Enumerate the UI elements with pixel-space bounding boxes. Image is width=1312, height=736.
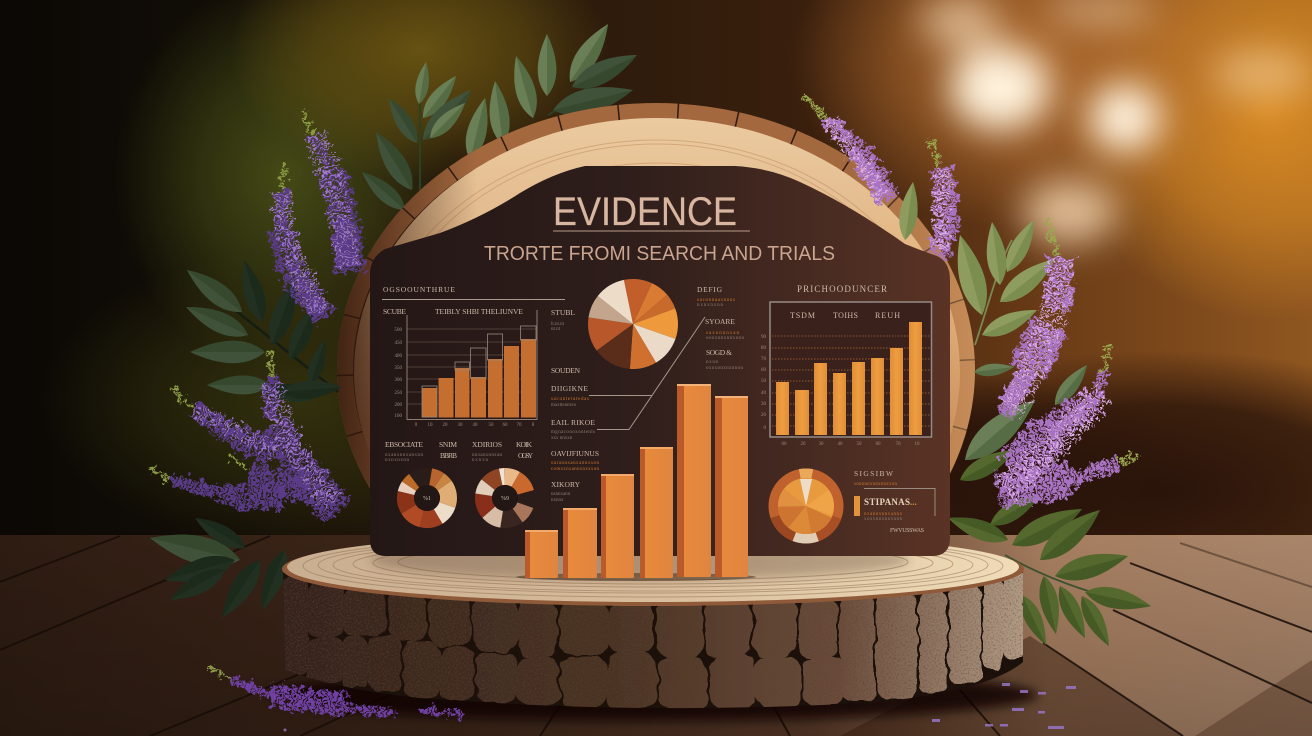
lavender sprig on floor	[210, 668, 464, 715]
middle text column: EAIL RIKOE	[551, 418, 595, 427]
middle text column: oarannxanxannxxon	[551, 461, 600, 466]
ring pie legend: nxannxnnxannx	[864, 512, 902, 517]
right bar chart: 30	[818, 442, 824, 447]
donut chart 1	[397, 468, 457, 528]
left bar chart: 10	[428, 423, 433, 428]
right text column: saxonnnxan	[706, 331, 740, 336]
right text column: DEFIG	[697, 285, 723, 294]
ring pie chart	[768, 468, 844, 544]
right text column: nxnn	[706, 360, 718, 365]
tree stump platform	[268, 532, 1038, 730]
lavender left lower	[150, 352, 338, 512]
bottom left labels: EBSOCIATE	[385, 440, 423, 449]
right bar chart: 50	[761, 379, 766, 384]
left bar chart: TEIBLY SHBI THELIUNVE	[435, 307, 523, 316]
left bar chart: 20	[442, 423, 448, 428]
left bar chart: OGSOOUNTHRUE	[383, 285, 455, 294]
ring pie legend	[854, 469, 935, 534]
bottom left labels: OGSY	[518, 451, 534, 460]
right bar chart: 40	[838, 442, 843, 447]
left bar chart	[382, 285, 565, 428]
right text column: SYOARE	[705, 317, 735, 326]
right bar chart: 0	[764, 426, 766, 431]
right bar chart: REUH	[875, 311, 900, 320]
right bar chart: 60	[876, 442, 881, 447]
left bar chart: 250	[394, 391, 402, 396]
middle text column: nsnnxann	[551, 492, 571, 497]
right bar chart: 70	[761, 357, 766, 362]
right text column: oxoxonxnxnnon	[706, 366, 744, 371]
ring pie legend: ...	[910, 497, 917, 507]
middle text column: nxnnx	[551, 498, 564, 503]
left bar chart: 70	[516, 423, 522, 428]
donut chart 2: %9	[501, 496, 509, 502]
right bar chart: 60	[761, 368, 766, 373]
connector lines	[589, 317, 705, 430]
ring pie legend: SIGSIBW	[854, 469, 894, 478]
middle text column: saconteratedas	[551, 397, 589, 402]
scattered petals	[284, 683, 1076, 732]
ring pie legend: soonnnxnnxnnxxon	[854, 482, 898, 487]
pie chart	[607, 298, 659, 350]
ring pie legend: STIPANAS	[864, 497, 910, 507]
left bar chart: 60	[502, 423, 508, 428]
middle text column: xxx nnxxn	[551, 436, 573, 441]
top leaf sprigs, behind slice	[356, 18, 642, 216]
right text column	[697, 285, 744, 371]
middle text column	[551, 308, 600, 503]
middle text column: XIKORY	[551, 480, 581, 489]
middle text column: DIIGIKNE	[551, 384, 588, 393]
bottom left labels: BBRB	[440, 451, 457, 460]
left bar chart: 450	[394, 341, 402, 346]
right leaf sprig	[896, 181, 1093, 488]
left bar chart: 30	[458, 423, 463, 428]
right bar chart: 20	[800, 442, 806, 447]
left bar chart: 200	[394, 403, 402, 408]
lavender right	[998, 218, 1140, 490]
middle text column: mgnaconoxontenls	[551, 430, 595, 435]
left bar chart: 100	[394, 414, 402, 419]
right bar chart: 30	[761, 402, 766, 407]
bottom left labels: nxnxnxnn	[385, 458, 410, 463]
left bar chart: SCUBE	[383, 307, 406, 316]
left bar chart: 40	[472, 423, 478, 428]
3D orange bars	[516, 384, 756, 581]
lavender left upper	[280, 113, 350, 318]
lavender top centre-right	[805, 97, 948, 258]
right lower leaf sprig	[945, 488, 1153, 650]
dashboard panel	[370, 166, 950, 556]
right bar chart: 40	[761, 391, 766, 396]
middle text column: STUBL	[551, 308, 575, 317]
right bar chart: PRICHOODUNCER	[797, 284, 887, 294]
lavender sprays	[150, 97, 1140, 512]
left bar chart: 300	[394, 378, 402, 383]
left bar chart: 50	[488, 423, 494, 428]
bottom left labels: nnxanxnnxan	[472, 453, 502, 458]
left bar chart: 8	[532, 423, 535, 428]
right bar chart: 50	[856, 442, 862, 447]
bottom left labels: XDIRIOS	[472, 440, 502, 449]
wood slice backdrop	[337, 103, 975, 637]
left leaf sprig	[181, 257, 343, 404]
right bar chart: 20	[761, 413, 766, 418]
bottom left labels: nxnxn	[472, 458, 488, 463]
foliage around the slice	[147, 181, 1153, 650]
middle text column: lt.nt.nt	[551, 322, 565, 327]
right bar chart: 90	[761, 335, 766, 340]
subtitle: TRORTE FROMI SEARCH AND TRIALS	[484, 243, 835, 265]
left lower leaf sprig	[147, 510, 294, 624]
right text column: oooxnnxnnxnnn	[706, 336, 744, 341]
ring pie legend: FWVUSSWAS	[890, 528, 924, 534]
left bar chart: 0	[415, 423, 418, 428]
middle text column: comxxnxannxnxxxon	[551, 467, 600, 472]
right bar chart: 80	[761, 346, 766, 351]
donut chart 1: %1	[423, 496, 431, 502]
right text column: SOGD &	[706, 348, 732, 357]
right text column: soconnaaxnnos	[697, 298, 735, 303]
bottom left labels: SNIM	[439, 440, 457, 449]
title: EVIDENCE	[553, 190, 737, 234]
middle text column: nt.nt	[551, 327, 561, 332]
right bar chart	[761, 284, 932, 447]
bark plates	[283, 566, 1023, 708]
right bar chart: 00	[782, 442, 787, 447]
bottom left labels: nxanxnnxanxnn	[385, 453, 424, 458]
right bar chart: 70	[896, 442, 901, 447]
left bar chart: 500	[394, 328, 402, 333]
middle text column: maxttenmxn	[551, 403, 576, 408]
bottom left labels: KOIK	[516, 440, 533, 449]
left bar chart: 400	[394, 354, 402, 359]
right bar chart: 10	[914, 442, 920, 447]
right bar chart: TSDM	[790, 311, 815, 320]
ring pie legend: xoxxnnxnnxnnn	[864, 517, 902, 522]
right text column: nxnxnxnn	[697, 303, 724, 308]
right bar chart: TOIHS	[833, 311, 858, 320]
wooden floor planks	[0, 535, 1312, 736]
donut chart 2	[484, 476, 526, 520]
left bar chart: 350	[394, 366, 402, 371]
middle text column: SOUDEN	[551, 366, 581, 375]
bottom left labels	[385, 440, 534, 463]
stump top face	[282, 532, 1024, 606]
middle text column: OAVIJFIUNUS	[551, 449, 599, 458]
